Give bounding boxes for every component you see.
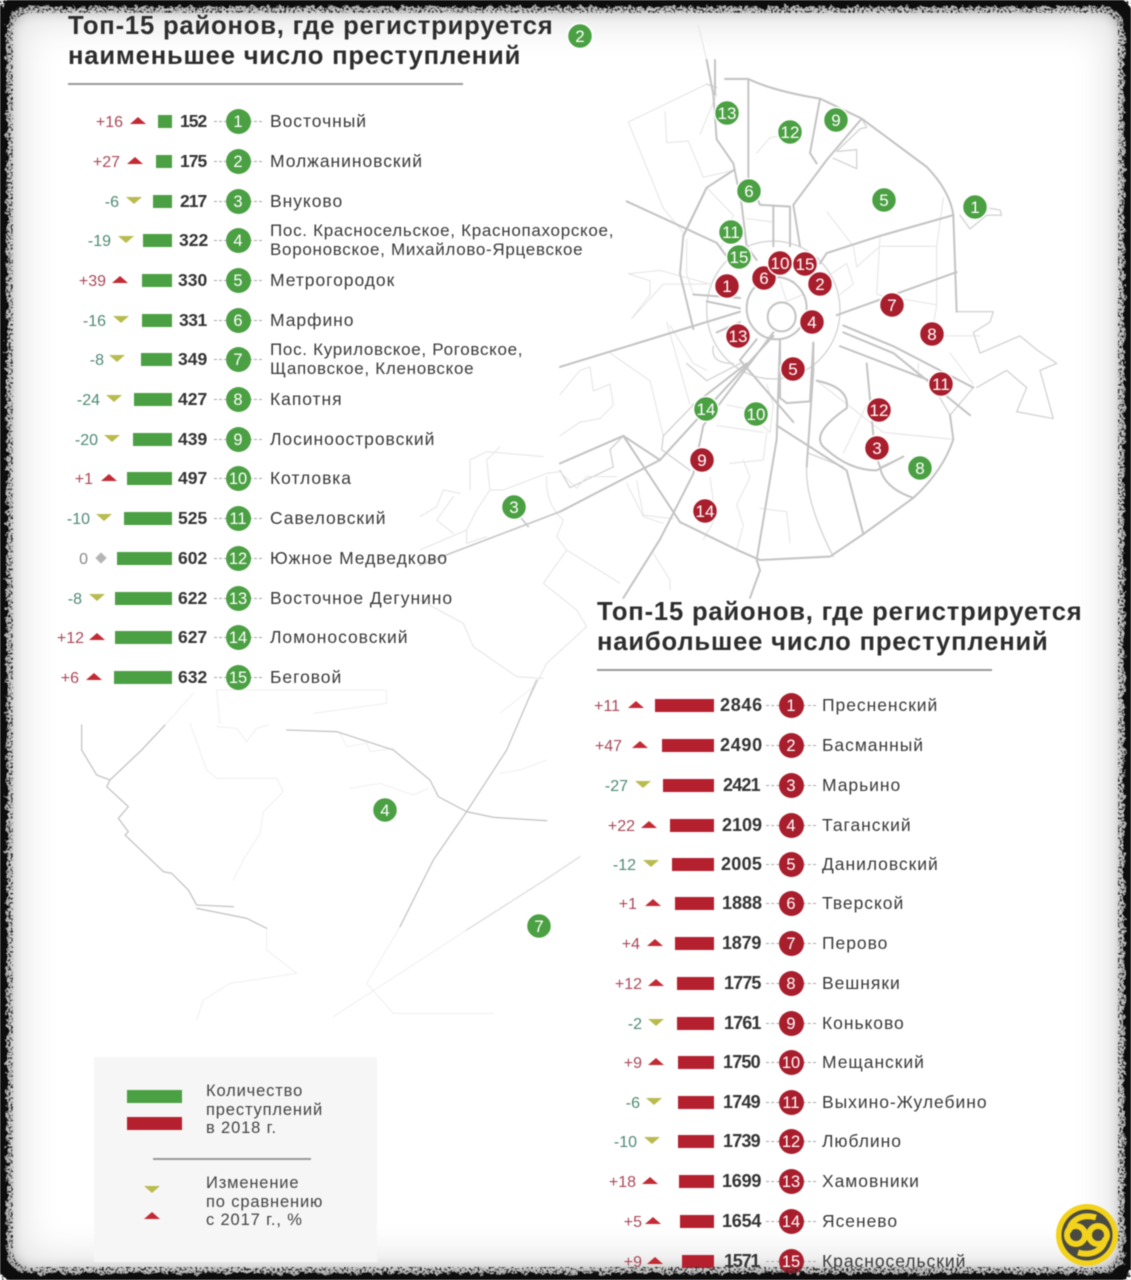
map markers: least crime districts: 8 bbox=[915, 459, 925, 478]
row: Коньково: 1761 bbox=[724, 1013, 760, 1033]
row: Лосиноостровский: Лосиноостровский bbox=[270, 429, 435, 449]
map markers: least crime districts: 6 bbox=[744, 182, 754, 201]
map markers: most crime districts: 13 bbox=[729, 327, 747, 346]
row: Пос. Куриловское: Щаповское, Кленовское bbox=[270, 359, 474, 378]
map markers: least crime districts: 13 bbox=[718, 104, 736, 123]
row: Пресненский: Пресненский bbox=[822, 695, 938, 715]
heading: lowest crime bbox=[68, 12, 554, 70]
row: Хамовники: +18 bbox=[609, 1174, 636, 1190]
row: Котловка: 497 bbox=[178, 468, 207, 488]
row: Тверской bbox=[618, 890, 904, 917]
row: Даниловский: 5 bbox=[786, 856, 796, 874]
ranking: 15 districts with most crimes bbox=[594, 692, 988, 1275]
row: Ясенево: 14 bbox=[782, 1213, 800, 1231]
row: Пресненский: +11 bbox=[594, 698, 620, 714]
row: Восточное Дегунино: 622 bbox=[178, 588, 207, 608]
map markers: most crime districts: 4 bbox=[807, 313, 817, 332]
row: Хамовники: 1699 bbox=[722, 1171, 761, 1191]
row: Выхино-Жулебино: -6 bbox=[626, 1094, 640, 1112]
row: Восточный: 1 bbox=[233, 113, 243, 131]
map markers: least crime districts: 15 bbox=[730, 248, 748, 267]
map markers: most crime districts: 9 bbox=[697, 451, 707, 470]
row: Восточное Дегунино: Восточное Дегунино bbox=[270, 588, 453, 608]
row: Перово: 7 bbox=[786, 935, 796, 953]
row: Красносельский: +9 bbox=[624, 1254, 642, 1270]
map markers: most crime districts: 2 bbox=[815, 275, 825, 294]
heading: highest crime: наибольшее число преступлений bbox=[597, 628, 1049, 656]
row: Южное Медведково: 602 bbox=[178, 548, 207, 568]
row: Таганский: 4 bbox=[786, 817, 796, 835]
row: Коньково: Коньково bbox=[822, 1013, 905, 1033]
row: Котловка: Котловка bbox=[270, 468, 352, 488]
row: Басманный bbox=[595, 732, 924, 759]
map markers: least crime districts: 5 bbox=[879, 191, 889, 210]
legend marker: down bbox=[144, 1186, 160, 1193]
row: Тверской: Тверской bbox=[822, 893, 904, 913]
row: Беговой bbox=[60, 664, 342, 691]
row: Савеловский: 525 bbox=[178, 508, 207, 528]
row: Пос. Красносельское: Вороновское, Михайлово-Ярцевское bbox=[270, 240, 583, 259]
row: Пресненский bbox=[594, 692, 938, 719]
row: Люблино: 1739 bbox=[723, 1131, 760, 1151]
row: Перово bbox=[622, 930, 888, 957]
row: Савеловский: -10 bbox=[67, 510, 90, 528]
row: Вешняки: 1775 bbox=[724, 973, 760, 993]
row: Марфино: 6 bbox=[233, 312, 243, 330]
map markers: least crime districts: 11 bbox=[722, 223, 740, 242]
row: Басманный: 2490 bbox=[720, 735, 763, 755]
row: Тверской: +1 bbox=[619, 896, 637, 912]
heading: highest crime: Топ-15 районов, где регистрируется bbox=[597, 598, 1083, 626]
row: Метрогородок: 5 bbox=[233, 272, 243, 290]
legend bar: green bbox=[127, 1090, 182, 1103]
map markers: least crime districts: 3 bbox=[509, 498, 519, 517]
legend text: change: по сравнению bbox=[206, 1192, 323, 1210]
row: Даниловский: 2005 bbox=[721, 854, 762, 874]
row: Даниловский: Даниловский bbox=[822, 854, 939, 874]
heading: lowest crime: Топ-15 районов, где регистрируется bbox=[68, 12, 554, 40]
row: Внуково: -6 bbox=[105, 194, 119, 210]
row: Пос. Красносельское bbox=[88, 221, 614, 260]
legend text: crime count bbox=[206, 1082, 323, 1137]
row: Хамовники: 13 bbox=[782, 1173, 800, 1191]
map markers: least crime districts: 7 bbox=[534, 917, 544, 936]
row: Ломоносовский: 14 bbox=[229, 629, 247, 647]
row: Красносельский bbox=[624, 1248, 966, 1275]
row: Беговой: 632 bbox=[178, 667, 207, 687]
row: Марьино: Марьино bbox=[822, 775, 901, 795]
row: Мещанский: 1750 bbox=[723, 1052, 760, 1072]
legend bbox=[94, 1057, 377, 1262]
row: Басманный: Басманный bbox=[822, 735, 924, 755]
row: Ясенево: +5 bbox=[624, 1214, 642, 1230]
row: Пос. Куриловское bbox=[90, 340, 523, 378]
row: Южное Медведково: 0 bbox=[79, 550, 88, 568]
map markers: least crime districts: 1 bbox=[970, 198, 980, 217]
row: Капотня: -24 bbox=[77, 392, 100, 408]
row: Капотня: 8 bbox=[233, 391, 243, 409]
row: Внуково: 3 bbox=[233, 193, 243, 211]
row: Мещанский bbox=[624, 1049, 925, 1076]
legend text: crime count: преступлений bbox=[206, 1100, 323, 1118]
row: Марьино bbox=[604, 772, 901, 799]
row: Молжаниновский: +27 bbox=[93, 154, 120, 170]
row: Метрогородок: 330 bbox=[178, 270, 207, 290]
map markers: least crime districts: 14 bbox=[697, 400, 715, 419]
row: Восточное Дегунино: 13 bbox=[229, 590, 247, 608]
row: Восточный: 152 bbox=[180, 111, 206, 131]
row: Восточный: Восточный bbox=[270, 111, 367, 131]
row: Марфино: 331 bbox=[179, 310, 207, 330]
row: Ломоносовский bbox=[57, 624, 408, 651]
row: Савеловский bbox=[66, 505, 386, 532]
row: Пос. Красносельское: 322 bbox=[179, 230, 208, 250]
row: Люблино: -10 bbox=[614, 1134, 637, 1150]
legend text: crime count: в 2018 г. bbox=[206, 1119, 277, 1137]
row: Лосиноостровский: 9 bbox=[233, 431, 243, 449]
row: Беговой: +6 bbox=[61, 670, 79, 686]
row: Лосиноостровский: -20 bbox=[75, 432, 98, 448]
map markers: least crime districts: 10 bbox=[747, 405, 765, 424]
map markers: most crime districts: 7 bbox=[887, 296, 897, 315]
row: Таганский bbox=[608, 812, 912, 839]
map markers: least crime districts: 2 bbox=[575, 27, 585, 46]
legend text: crime count: Количество bbox=[206, 1082, 303, 1100]
row: Тверской: 6 bbox=[786, 895, 796, 913]
legend bar: red bbox=[127, 1117, 182, 1130]
map markers: most crime districts: 8 bbox=[927, 325, 937, 344]
row: Ломоносовский: 627 bbox=[178, 627, 207, 647]
map markers: least crime districts: 9 bbox=[831, 111, 841, 130]
icon: yellow 69 logo bbox=[1055, 1203, 1119, 1267]
row: Пресненский: 1 bbox=[786, 697, 796, 715]
row: Внуково: 217 bbox=[180, 191, 206, 211]
legend text: change: Изменение bbox=[206, 1174, 299, 1192]
row: Коньково: -2 bbox=[628, 1016, 642, 1032]
row: Ломоносовский: +12 bbox=[57, 630, 84, 646]
row: Южное Медведково: 12 bbox=[229, 550, 247, 568]
map markers: least crime districts: 12 bbox=[781, 123, 799, 142]
row: Пос. Куриловское: Пос. Куриловское, Роговское, bbox=[270, 340, 523, 359]
row: Котловка: +1 bbox=[75, 470, 93, 488]
row: Савеловский: 11 bbox=[229, 510, 247, 528]
legend text: change: с 2017 г., % bbox=[206, 1211, 303, 1229]
row: Красносельский: 1571 bbox=[724, 1251, 759, 1271]
row: Марьино: 3 bbox=[786, 777, 796, 795]
row: Беговой: Беговой bbox=[270, 667, 342, 687]
row: Внуково bbox=[104, 188, 343, 215]
row: Таганский: 2109 bbox=[722, 815, 762, 835]
map markers: most crime districts bbox=[690, 250, 954, 524]
row: Марьино: -27 bbox=[605, 778, 628, 794]
row: Лосиноостровский: 439 bbox=[178, 429, 207, 449]
row: Басманный: 2 bbox=[786, 737, 796, 755]
row: Пос. Красносельское: Пос. Красносельское, Краснопахорское, bbox=[270, 221, 614, 240]
row: Тверской: 1888 bbox=[722, 893, 762, 913]
row: Выхино-Жулебино bbox=[626, 1089, 988, 1116]
row: Молжаниновский bbox=[93, 148, 423, 175]
row: Молжаниновский: 175 bbox=[180, 151, 206, 171]
row: Котловка: 10 bbox=[229, 470, 247, 488]
row: Метрогородок: Метрогородок bbox=[270, 270, 395, 290]
row: Коньково: 9 bbox=[786, 1015, 796, 1033]
row: Восточное Дегунино: -8 bbox=[68, 590, 82, 608]
row: Южное Медведково bbox=[79, 545, 448, 572]
row: Восточный: +16 bbox=[96, 114, 123, 130]
row: Внуково: Внуково bbox=[270, 191, 343, 211]
map markers: most crime districts: 11 bbox=[932, 375, 950, 394]
row: Хамовники bbox=[609, 1168, 920, 1195]
map markers: most crime districts: 3 bbox=[872, 439, 882, 458]
map markers: most crime districts: 10 bbox=[771, 254, 789, 273]
row: Красносельский: Красносельский bbox=[822, 1251, 966, 1271]
row: Мещанский: Мещанский bbox=[822, 1052, 925, 1072]
row: Савеловский: Савеловский bbox=[270, 508, 386, 528]
row: Восточный bbox=[96, 108, 367, 135]
row: Марфино: -16 bbox=[83, 312, 106, 330]
row: Даниловский bbox=[612, 851, 939, 878]
map markers: least crime districts bbox=[372, 24, 988, 938]
row: Метрогородок: +39 bbox=[79, 272, 106, 290]
row: Люблино: 12 bbox=[782, 1133, 800, 1151]
row: Вешняки: Вешняки bbox=[822, 973, 901, 993]
row: Люблино: Люблино bbox=[822, 1131, 902, 1151]
map markers: most crime districts: 15 bbox=[796, 255, 814, 274]
row: Капотня: Капотня bbox=[270, 389, 343, 409]
heading: highest crime bbox=[596, 598, 1083, 656]
row: Люблино bbox=[614, 1128, 902, 1155]
row: Таганский: Таганский bbox=[822, 815, 912, 835]
ranking: 15 districts with fewest crimes bbox=[57, 108, 614, 691]
row: Мещанский: 10 bbox=[782, 1054, 800, 1072]
row: Выхино-Жулебино: 11 bbox=[782, 1094, 800, 1112]
row: Даниловский: -12 bbox=[613, 856, 636, 874]
row: Перово: Перово bbox=[822, 933, 888, 953]
legend text: change bbox=[206, 1174, 323, 1229]
row: Беговой: 15 bbox=[229, 669, 247, 687]
row: Выхино-Жулебино: Выхино-Жулебино bbox=[822, 1092, 988, 1112]
heading: lowest crime: наименьшее число преступлений bbox=[68, 42, 521, 70]
row: Южное Медведково: Южное Медведково bbox=[270, 548, 448, 568]
row: Пресненский: 2846 bbox=[720, 695, 763, 715]
row: Пос. Куриловское: 7 bbox=[233, 351, 243, 369]
row: Ломоносовский: Ломоносовский bbox=[270, 627, 408, 647]
map markers: most crime districts: 12 bbox=[870, 401, 888, 420]
row: Пос. Куриловское: 349 bbox=[178, 349, 207, 369]
row: Ясенево: 1654 bbox=[722, 1211, 761, 1231]
row: Басманный: +47 bbox=[595, 738, 622, 754]
map markers: least crime districts: 4 bbox=[380, 801, 390, 820]
row: Лосиноостровский bbox=[74, 426, 435, 453]
map markers: most crime districts: 6 bbox=[759, 269, 769, 288]
legend marker: up bbox=[144, 1212, 160, 1219]
row: Метрогородок bbox=[79, 267, 395, 294]
row: Хамовники: Хамовники bbox=[822, 1171, 920, 1191]
row: Коньково bbox=[628, 1010, 905, 1037]
row: Капотня: 427 bbox=[178, 389, 207, 409]
row: Капотня bbox=[76, 386, 343, 413]
row: Марьино: 2421 bbox=[723, 775, 760, 795]
row: Ясенево bbox=[624, 1208, 898, 1235]
row: Молжаниновский: Молжаниновский bbox=[270, 151, 423, 171]
map markers: most crime districts: 14 bbox=[696, 502, 714, 521]
row: Пос. Красносельское: -19 bbox=[88, 232, 111, 250]
row: Восточное Дегунино bbox=[68, 585, 453, 612]
row: Вешняки: 8 bbox=[786, 975, 796, 993]
row: Перово: +4 bbox=[622, 936, 640, 952]
row: Вешняки: +12 bbox=[615, 976, 642, 992]
row: Котловка bbox=[74, 465, 352, 492]
row: Таганский: +22 bbox=[608, 818, 635, 834]
row: Вешняки bbox=[615, 970, 901, 997]
row: Ясенево: Ясенево bbox=[822, 1211, 898, 1231]
row: Выхино-Жулебино: 1749 bbox=[723, 1092, 760, 1112]
row: Мещанский: +9 bbox=[624, 1054, 642, 1072]
map markers: most crime districts: 5 bbox=[788, 360, 798, 379]
row: Красносельский: 15 bbox=[782, 1253, 800, 1271]
row: Молжаниновский: 2 bbox=[233, 153, 243, 171]
row: Пос. Куриловское: -8 bbox=[90, 352, 104, 368]
row: Марфино: Марфино bbox=[270, 310, 354, 330]
row: Марфино bbox=[82, 307, 354, 334]
row: Пос. Красносельское: 4 bbox=[233, 232, 243, 250]
map markers: most crime districts: 1 bbox=[722, 277, 732, 296]
row: Перово: 1879 bbox=[722, 933, 761, 953]
